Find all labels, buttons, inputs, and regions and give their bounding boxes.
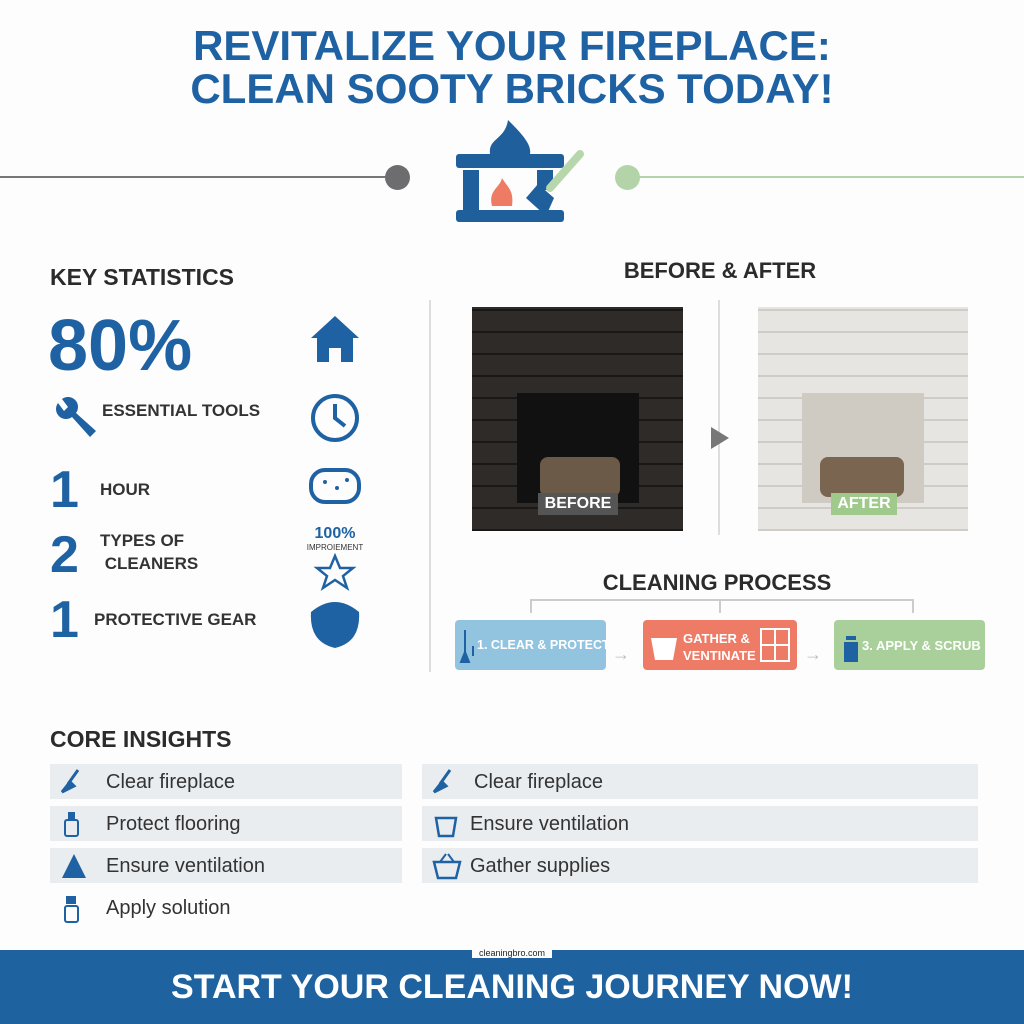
image: before [472,307,683,531]
stats list: 1 [50,461,79,519]
stats list: PROTECTIVE GEAR [94,610,256,629]
text: Ensure ventilation [106,855,265,877]
step 3: 3. APPLY & SCRUB [862,638,981,653]
insights rows [50,764,402,799]
stats list: HOUR [100,480,150,499]
text: → [804,644,822,664]
footer: cleaningbro.com [479,948,545,958]
stats list: TYPES OF [100,531,184,550]
title [190,22,834,112]
stat icons: 100% [315,525,355,542]
header divider with icon [0,165,1024,190]
stats list [48,306,260,649]
step 2 [643,620,797,670]
footer [0,950,1024,1024]
stat icons [307,316,364,648]
step 2: GATHER & [683,631,750,646]
title: CLEAN SOOTY BRICKS TODAY! [190,65,834,112]
step 2: VENTINATE [683,648,756,663]
heading: core insights: CORE INSIGHTS [50,726,231,752]
icon: fireplace with brush [456,120,584,222]
footer: START YOUR CLEANING JOURNEY NOW! [171,968,853,1006]
heading: cleaning process: CLEANING PROCESS [603,570,831,595]
text: Gather supplies [470,855,610,877]
step 3 [834,620,985,670]
text: Protect flooring [106,813,241,835]
image: before: BEFORE [545,495,611,512]
image: after: AFTER [837,495,891,512]
stats list: 80% [48,306,192,386]
step 1: 1. CLEAR & PROTECT [477,638,610,652]
insights rows: Clear fireplace [106,771,235,793]
stats list: CLEANERS [105,554,198,573]
image: after [758,307,968,531]
text: Apply solution [106,897,231,919]
step 1 [455,620,606,670]
stats list: 2 [50,526,79,584]
text: Ensure ventilation [470,813,629,835]
title: REVITALIZE YOUR FIREPLACE: [193,22,831,69]
heading: key statistics: KEY STATISTICS [50,264,234,290]
heading: before & after: BEFORE & AFTER [624,258,816,283]
stat icons: IMPROIEMENT [307,543,363,552]
stats list: 1 [50,591,79,649]
text: → [612,644,630,664]
text: Clear fireplace [474,771,603,793]
arrow [711,427,729,449]
stats list: ESSENTIAL TOOLS [102,401,260,420]
